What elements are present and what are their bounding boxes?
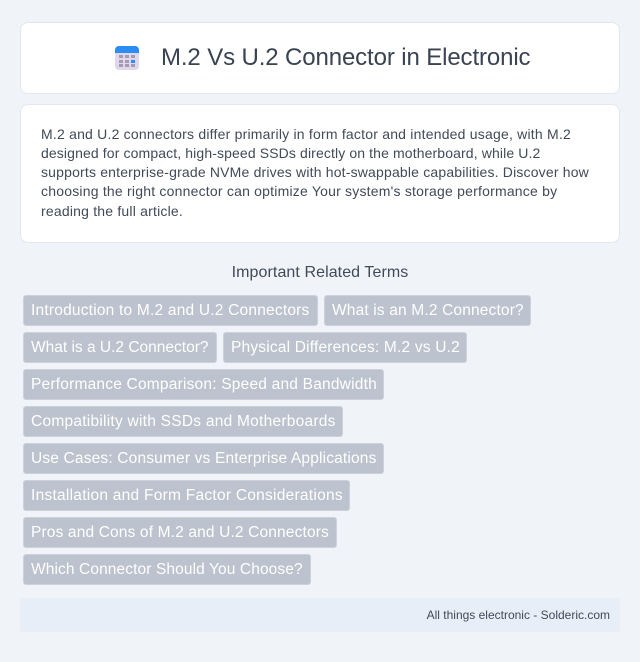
intro text: choosing the right connector can optimize Your system's storage performance by xyxy=(41,183,557,199)
tag: What is a U.2 Connector? xyxy=(31,339,208,356)
tag: Installation and Form Factor Considerations xyxy=(31,487,343,504)
tag: What is an M.2 Connector? xyxy=(332,302,524,319)
tag xyxy=(23,480,350,511)
intro text xyxy=(41,126,589,219)
intro card xyxy=(20,104,620,243)
footer xyxy=(20,598,620,632)
intro text: M.2 and U.2 connectors differ primarily in form factor and intended usage, with M.2 xyxy=(41,126,571,142)
tag: Physical Differences: M.2 vs U.2 xyxy=(231,339,460,356)
intro text: supports enterprise-grade NVMe drives with hot-swappable capabilities. Discover how xyxy=(41,164,589,180)
tag xyxy=(23,554,311,585)
tag xyxy=(223,332,467,363)
tag xyxy=(23,406,343,437)
tag xyxy=(23,332,217,363)
intro text: designed for compact, high-speed SSDs directly on the motherboard, while U.2 xyxy=(41,145,540,161)
tag: Which Connector Should You Choose? xyxy=(31,561,303,578)
tag xyxy=(23,443,384,474)
section heading: Important Related Terms xyxy=(232,264,408,281)
header card xyxy=(20,22,620,94)
icon: calendar xyxy=(115,46,139,70)
tag: Pros and Cons of M.2 and U.2 Connectors xyxy=(31,524,329,541)
footer: All things electronic - Solderic.com xyxy=(427,608,610,622)
tag: Use Cases: Consumer vs Enterprise Applications xyxy=(31,450,377,467)
tag: Introduction to M.2 and U.2 Connectors xyxy=(31,302,310,319)
tag xyxy=(324,295,531,326)
tag xyxy=(23,517,337,548)
intro text: reading the full article. xyxy=(41,203,183,219)
tag: Performance Comparison: Speed and Bandwidth xyxy=(31,376,377,393)
related term tags xyxy=(23,295,531,585)
tag: Compatibility with SSDs and Motherboards xyxy=(31,413,336,430)
tag xyxy=(23,369,384,400)
tag xyxy=(23,295,318,326)
title: M.2 Vs U.2 Connector in Electronic xyxy=(161,44,530,71)
